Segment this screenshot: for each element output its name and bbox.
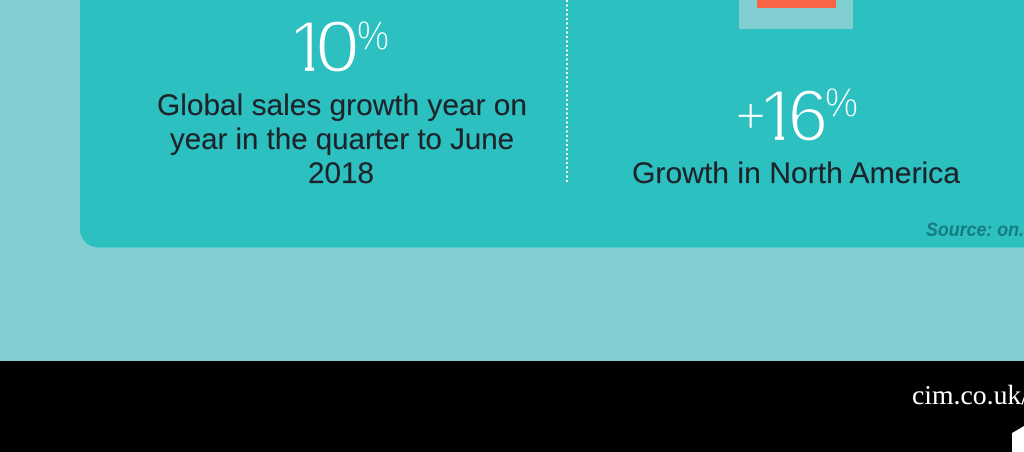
- statistic: 16 percent North America growth: 1: [758, 76, 799, 157]
- statistic: 10 percent global growth: %: [357, 12, 389, 59]
- statistic: 10 percent global growth: Global sales growth year on: [157, 89, 527, 122]
- statistic: 10 percent global growth: [158, 21, 526, 184]
- footer web address: cim.co.uk/: [912, 380, 1024, 410]
- statistic: 16 percent North America growth: +: [736, 87, 766, 145]
- statistic: 16 percent North America growth: %: [825, 79, 858, 126]
- footer bar: [0, 361, 1024, 452]
- footer logo fragment: [1012, 426, 1024, 452]
- statistic: 16 percent North America growth: 6: [788, 76, 828, 157]
- statistic: 10 percent global growth: year in the quarter to June: [170, 123, 514, 156]
- statistic: 10 percent global growth: 2018: [308, 157, 374, 190]
- statistic: 16 percent North America growth: [633, 88, 960, 184]
- statistic: 16 percent North America growth: Growth in North America: [632, 157, 961, 190]
- statistic: 10 percent global growth: 1: [288, 7, 329, 88]
- icon: partial chart block: [739, 0, 853, 29]
- panel: sales growth statistics: [80, 0, 1024, 248]
- statistic: 10 percent global growth: 0: [316, 7, 360, 88]
